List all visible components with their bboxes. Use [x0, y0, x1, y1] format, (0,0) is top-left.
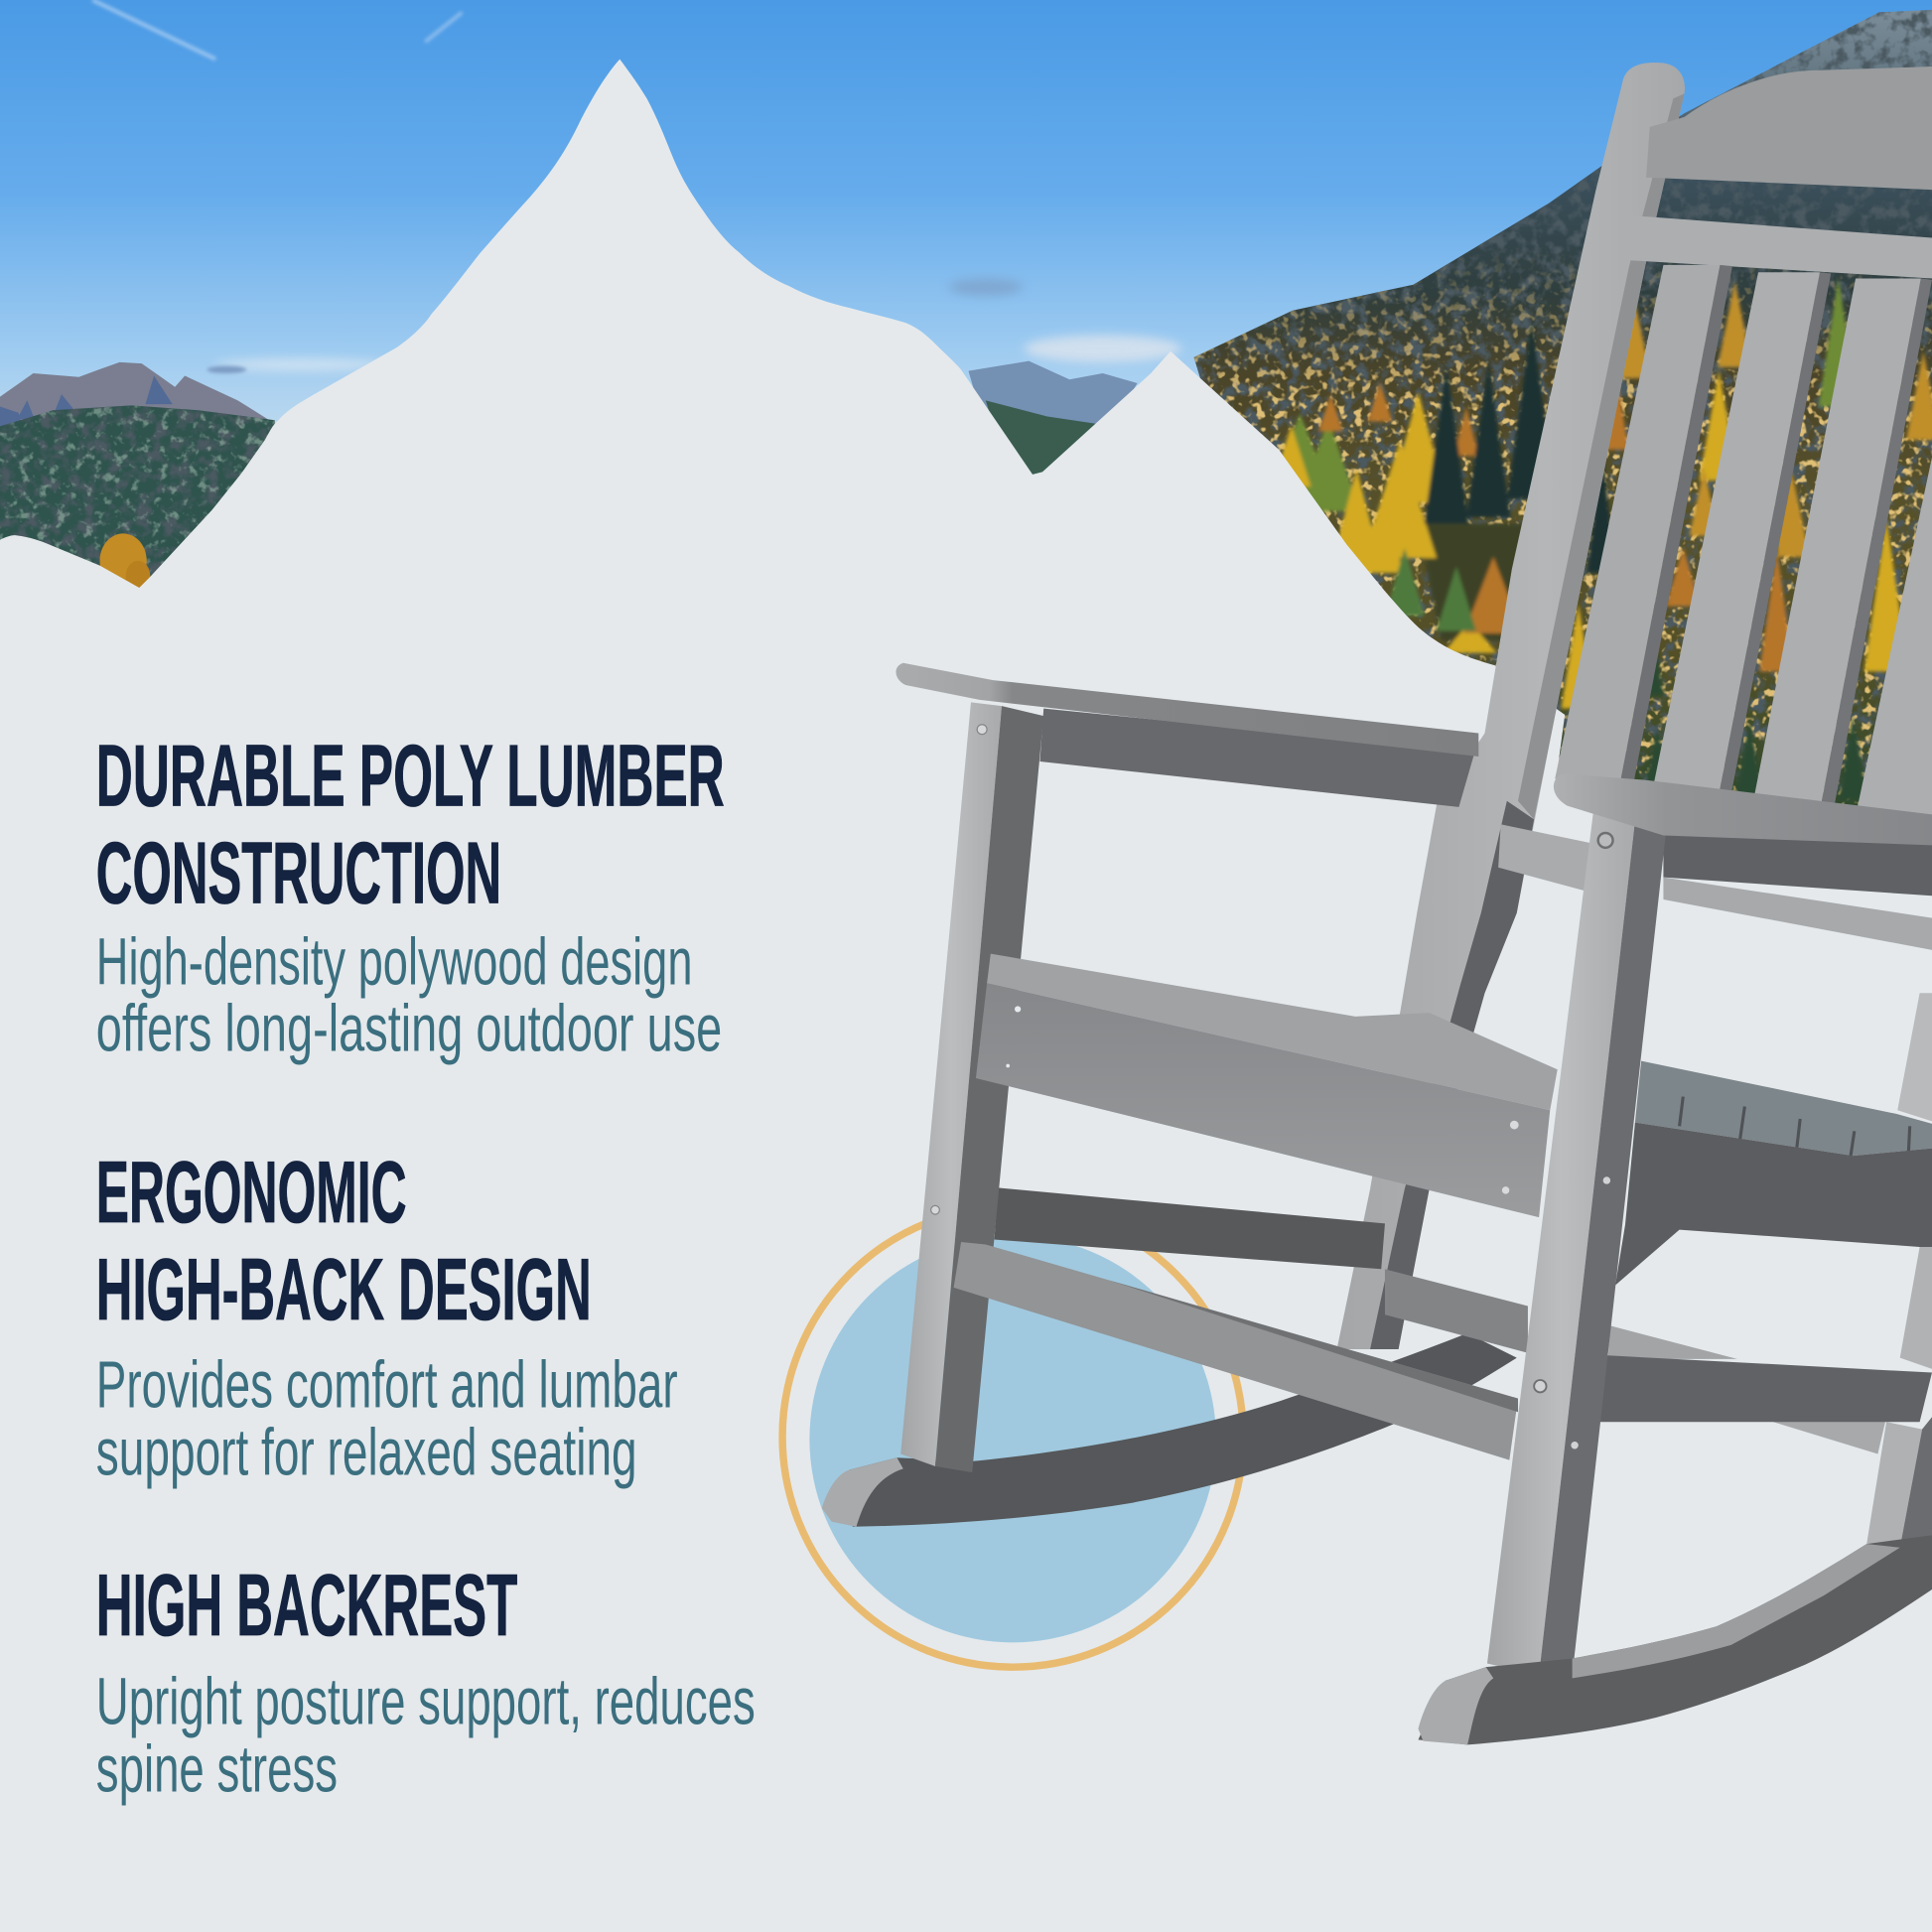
rear back post: [1337, 63, 1685, 1349]
yellow larches: [1272, 369, 1908, 709]
far seat slat grooves: [1680, 1097, 1910, 1156]
back stretcher: [995, 1187, 1385, 1269]
yellow-green larches: [1292, 279, 1847, 514]
description: High-density polywood design: [96, 925, 692, 1000]
far right post middle: [1900, 1247, 1932, 1369]
description line 2: offers long-lasting outdoor use: [96, 992, 722, 1066]
back slats: [1555, 265, 1932, 826]
right arm back strip: [1498, 824, 1589, 893]
left rocker tip: [822, 1457, 903, 1527]
description line 2: spine stress: [96, 1732, 338, 1807]
heading line 2: CONSTRUCTION: [96, 824, 501, 922]
right side stretcher: [1598, 1325, 1932, 1453]
right rocker: [1418, 1535, 1932, 1744]
left forest hill: [0, 405, 276, 588]
orange larches: [1318, 376, 1794, 671]
heading: HIGH BACKREST: [96, 1556, 517, 1654]
far right post upper: [1897, 993, 1932, 1121]
seat front rail: [976, 983, 1550, 1217]
far right post lower: [1866, 1417, 1932, 1548]
heading line 2: HIGH-BACK DESIGN: [96, 1240, 592, 1338]
heading: ERGONOMIC: [96, 1143, 407, 1241]
side rail: [954, 1242, 1518, 1460]
description: Upright posture support, reduces: [96, 1664, 756, 1738]
left rocker: [849, 1333, 1517, 1527]
left front post: [900, 702, 1043, 1472]
description: Provides comfort and lumbar: [96, 1347, 678, 1422]
description line 2: support for relaxed seating: [96, 1416, 637, 1490]
light strip under right arm: [1663, 878, 1932, 950]
back upper rail: [1624, 215, 1932, 278]
right arm top: [1554, 773, 1932, 845]
decorative gold ring: [782, 1206, 1243, 1667]
rocking chair: [822, 63, 1932, 1744]
right arm support beam: [1663, 828, 1932, 896]
back crest rail: [1646, 67, 1932, 190]
left arm support beam: [1039, 709, 1475, 807]
left arm top: [896, 663, 1478, 757]
right front post: [1487, 813, 1666, 1676]
heading: DURABLE POLY LUMBER: [96, 727, 725, 825]
rear cross bar: [1385, 1269, 1528, 1353]
text block: durable poly lumber: [96, 727, 725, 1066]
left distant mountain: [0, 362, 277, 431]
text block: ergonomic high-back design: [96, 1143, 678, 1490]
sky background: [0, 0, 1932, 431]
green trees: [1385, 548, 1476, 630]
dark ground: [1417, 523, 1528, 640]
gold larches: [1619, 281, 1932, 557]
under seat frame: [1615, 1123, 1932, 1285]
central distant peaks: [968, 361, 1138, 481]
seat top surface: [987, 954, 1558, 1110]
far seat top: [1635, 1061, 1932, 1156]
clouds: [92, 0, 1181, 373]
right forested mountain: [1193, 10, 1932, 806]
dark conifers: [1425, 321, 1616, 573]
decorative blue circle: [809, 1236, 1216, 1642]
text block: high backrest: [96, 1556, 756, 1807]
lower dark green trees: [1641, 516, 1864, 804]
